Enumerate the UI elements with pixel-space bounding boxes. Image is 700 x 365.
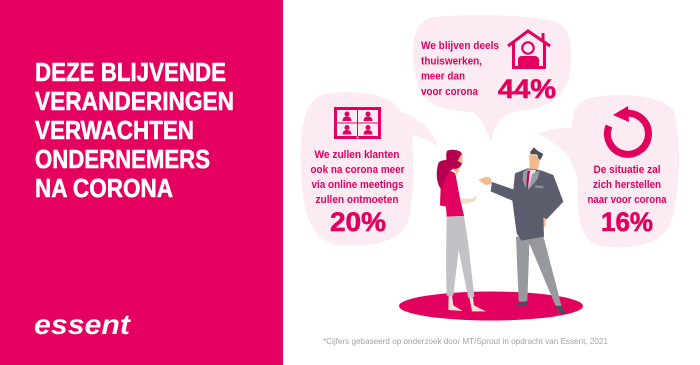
- text: herstellen: De situatie zal: [594, 164, 660, 176]
- illustration: woman: [437, 150, 486, 311]
- stat: 20%: 20%: [330, 207, 386, 237]
- text: online meetings: We zullen klanten: [314, 149, 400, 161]
- panel: left pink background: [0, 0, 283, 365]
- panel: speech bubble top: [413, 15, 571, 142]
- logo: essent: essent: [34, 309, 132, 340]
- icon: circular arrow: [607, 106, 648, 154]
- title: NA CORONA: [35, 173, 173, 203]
- footnote: *Cijfers gebaseerd op onderzoek door MT/Sprout in opdracht van Essent, 2021: [323, 336, 608, 346]
- text: online meetings: zullen ontmoeten: [316, 194, 398, 206]
- panel: speech bubble right: [538, 95, 679, 248]
- text: herstellen: naar voor corona: [588, 194, 667, 206]
- text: thuiswerken: voor corona: [421, 86, 479, 98]
- title: ONDERNEMERS: [35, 144, 210, 174]
- text: herstellen: zich herstellen: [593, 179, 661, 191]
- text: herstellen: [588, 164, 667, 206]
- illustration: man: [478, 147, 566, 314]
- text: thuiswerken: [421, 40, 499, 98]
- title: VERANDERINGEN: [35, 86, 234, 116]
- text: thuiswerken: meer dan: [421, 70, 465, 82]
- icon: person in house: [508, 31, 550, 68]
- title: [35, 57, 234, 203]
- title: DEZE BLIJVENDE: [35, 57, 226, 87]
- text: online meetings: via online meetings: [312, 179, 404, 191]
- stat: 44%: 44%: [498, 74, 556, 104]
- panel: speech bubble left: [301, 92, 438, 246]
- title: VERWACHTEN: [35, 115, 194, 145]
- text: thuiswerken: thuiswerken,: [421, 56, 482, 68]
- floor ellipse: [399, 292, 583, 320]
- text: online meetings: [310, 149, 405, 206]
- icon: video meeting screen: [335, 108, 380, 138]
- text: thuiswerken: We blijven deels: [421, 40, 499, 52]
- stat: 16%: 16%: [601, 207, 653, 237]
- text: online meetings: ook na corona meer: [310, 164, 405, 176]
